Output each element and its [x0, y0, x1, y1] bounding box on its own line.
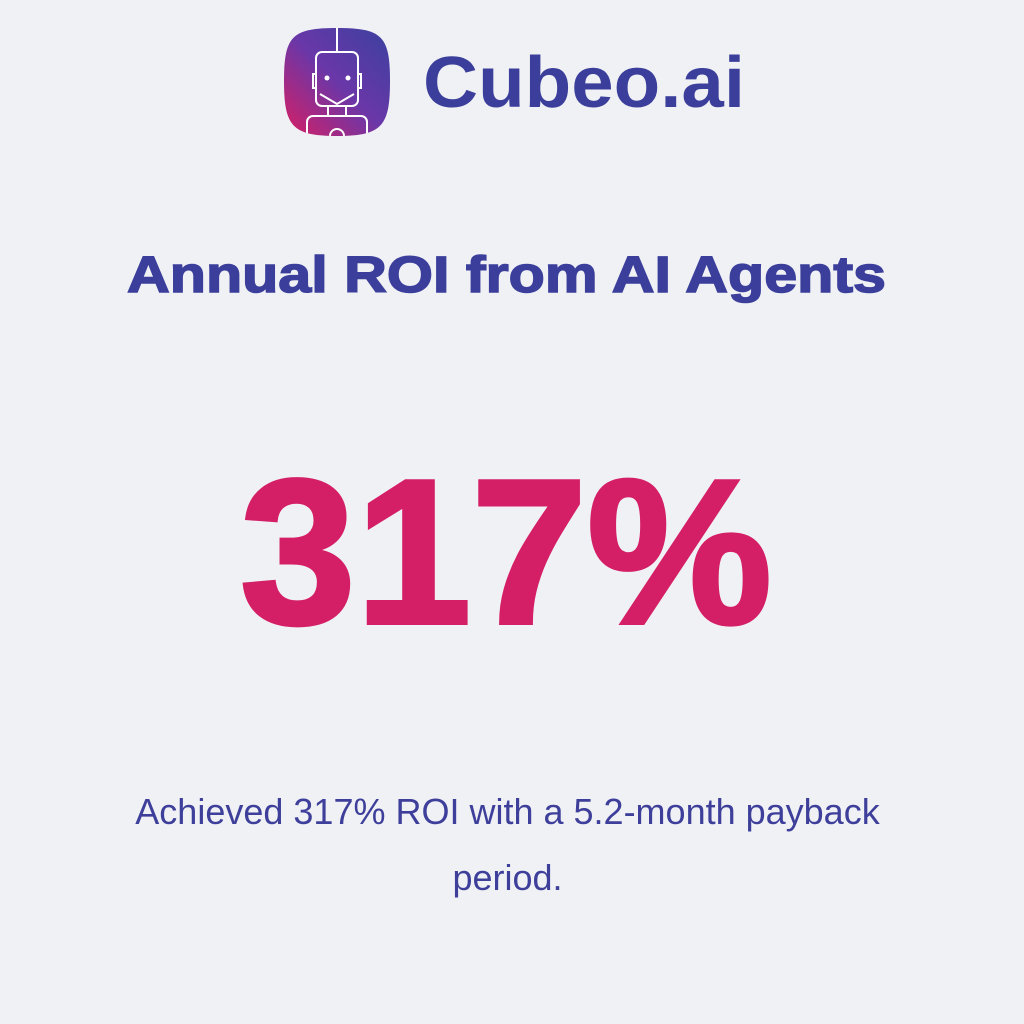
subtitle: period. — [452, 857, 563, 898]
logo — [284, 28, 745, 136]
logo text: Cubeo.ai — [423, 43, 745, 123]
title: Annual ROI from AI Agents — [127, 246, 886, 303]
subtitle — [135, 791, 880, 898]
subtitle: Achieved 317% ROI with a 5.2-month payback — [135, 791, 880, 832]
icon: robot — [284, 28, 390, 136]
